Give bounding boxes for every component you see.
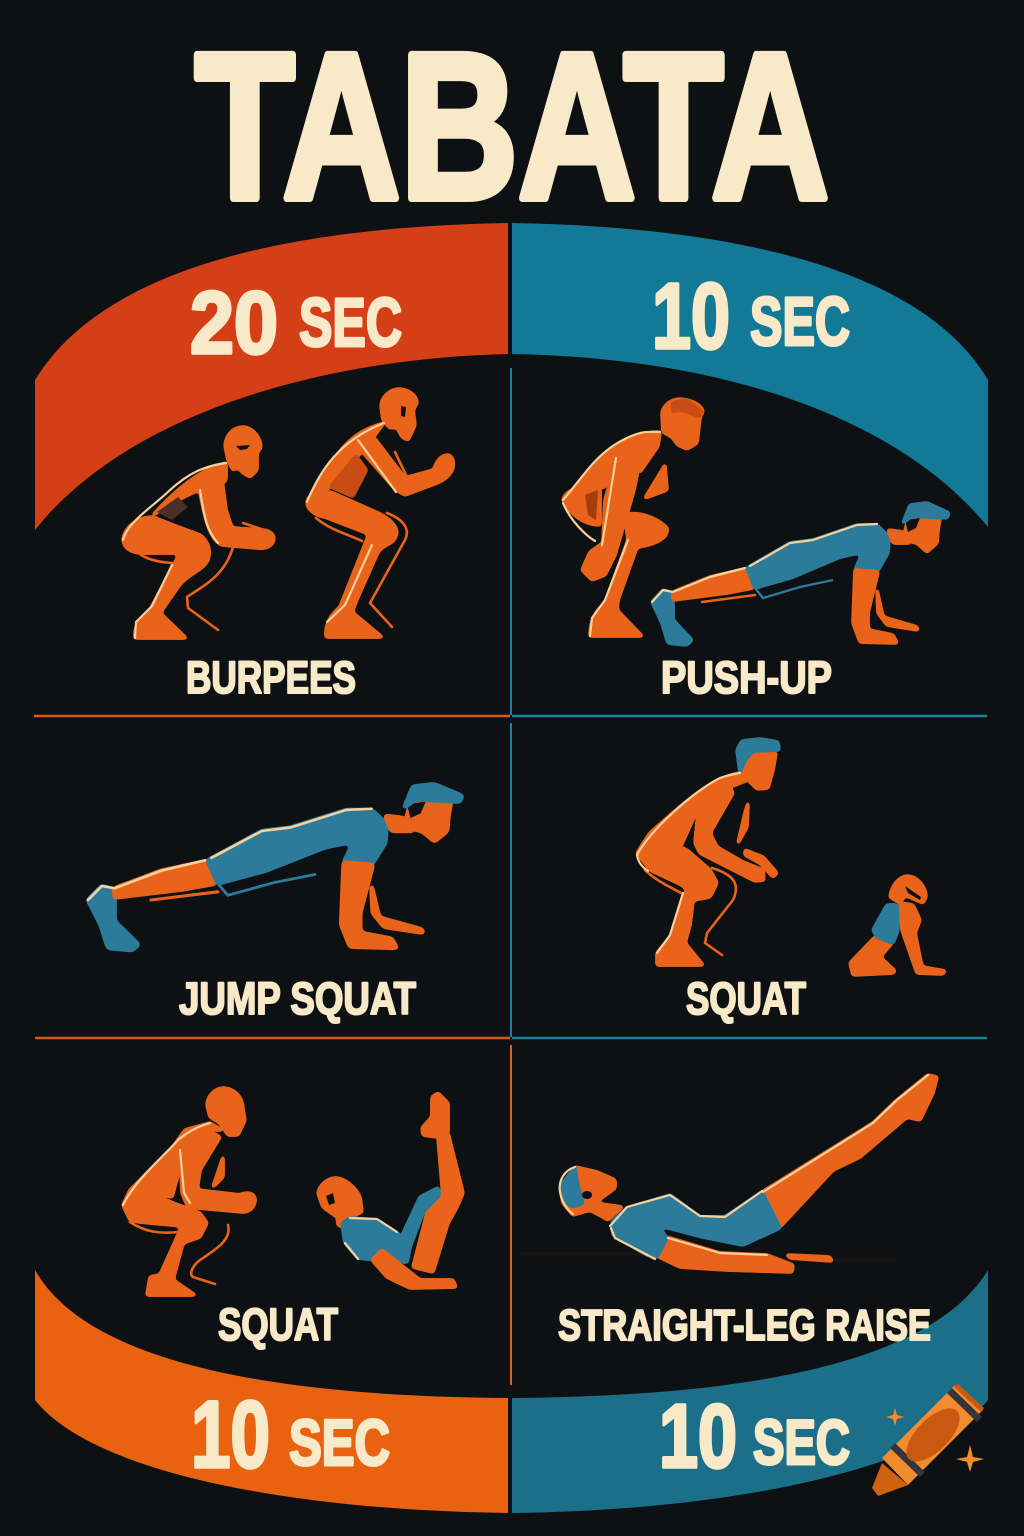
label: 10 sec bottom left: SEC bbox=[289, 1406, 390, 1479]
label: 10 sec top: 10 bbox=[652, 264, 730, 368]
label: 10 sec bottom right: SEC bbox=[753, 1408, 850, 1478]
figure: squat with hands forward bbox=[123, 427, 274, 638]
band: 10 sec bottom right bbox=[512, 1270, 988, 1513]
figure: plank position large bbox=[88, 784, 462, 950]
title: TABATA bbox=[195, 11, 829, 243]
figure: plank position bbox=[652, 503, 949, 645]
label: straight-leg raise: STRAIGHT-LEG RAISE bbox=[558, 1301, 931, 1350]
panel: squat left bbox=[123, 1088, 463, 1350]
figure: squat with fist forward bbox=[123, 1088, 255, 1295]
label: 20 sec bbox=[190, 273, 402, 372]
label: push-up: PUSH-UP bbox=[661, 652, 832, 703]
figure: lying leg raise bbox=[520, 1075, 937, 1272]
panel: squat right bbox=[637, 739, 945, 1024]
figure: squat with blue hair bbox=[637, 739, 779, 965]
label: 10 sec bottom left: 10 bbox=[191, 1382, 270, 1488]
label: 20 sec: 20 bbox=[190, 273, 278, 372]
label: 10 sec bottom right: 10 bbox=[659, 1387, 737, 1487]
panel: push-up bbox=[563, 399, 949, 703]
band: 20 sec work bbox=[35, 223, 508, 530]
label: 10 sec bottom left bbox=[191, 1382, 390, 1488]
panel: jump squat bbox=[88, 784, 462, 1024]
label: squat: SQUAT bbox=[218, 1299, 338, 1350]
label: 10 sec top: SEC bbox=[750, 283, 850, 360]
panel: straight-leg raise bbox=[520, 1075, 937, 1350]
band: 10 sec rest top bbox=[512, 223, 988, 527]
label: jump squat: JUMP SQUAT bbox=[179, 973, 416, 1024]
label: 10 sec bottom right bbox=[659, 1387, 850, 1487]
figure: rising squat with fists up bbox=[307, 389, 453, 637]
figure: standing crouch with arm hanging bbox=[563, 399, 703, 636]
icon: crayon with sparkles bbox=[872, 1384, 984, 1496]
label: squat: SQUAT bbox=[686, 973, 806, 1024]
label: burpees: BURPEES bbox=[186, 652, 356, 703]
figure: floor leg lift bbox=[318, 1093, 463, 1288]
label: 10 sec top bbox=[652, 264, 850, 368]
label: 20 sec: SEC bbox=[299, 284, 402, 361]
panel: burpees bbox=[123, 389, 453, 703]
figure: small crawling person bbox=[850, 876, 945, 975]
band: 10 sec bottom left bbox=[35, 1270, 508, 1513]
